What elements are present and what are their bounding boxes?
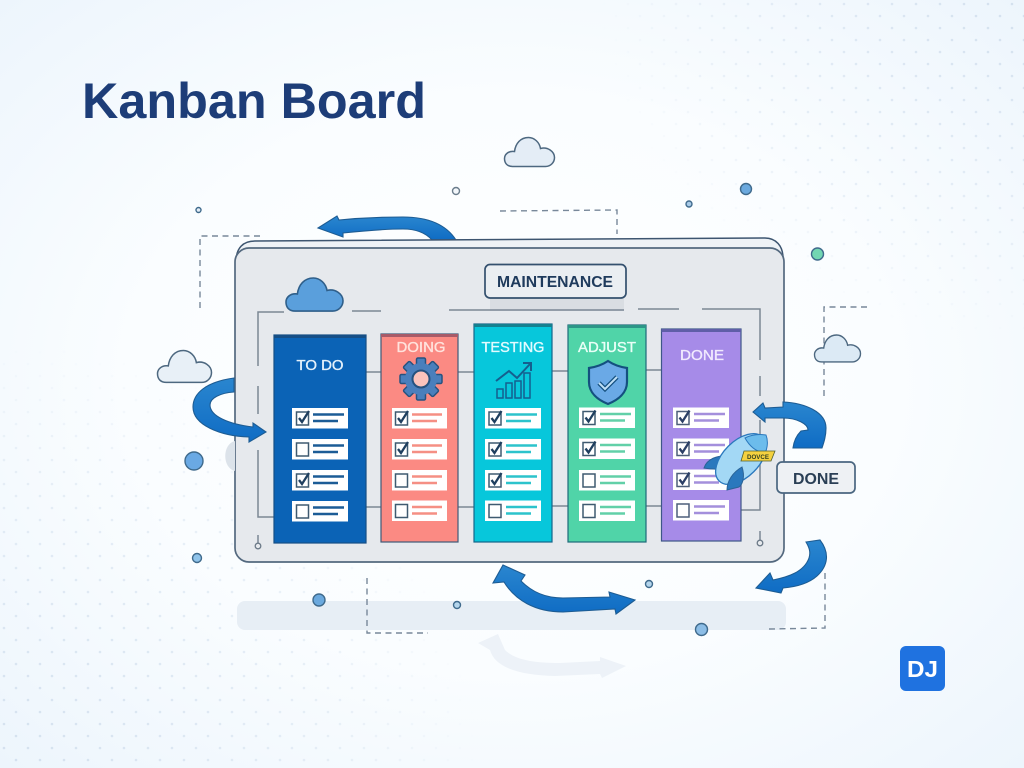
arrow: left — [193, 378, 266, 442]
arrow: bottom double-headed — [493, 565, 635, 614]
arrow: bottom right — [756, 540, 826, 593]
logo: DJ: DJ — [907, 656, 938, 682]
label: maintenance: MAINTENANCE — [497, 274, 613, 291]
arrow: right loop — [753, 402, 826, 448]
icon: growth chart — [496, 363, 531, 398]
column: testing — [474, 324, 552, 542]
column: to do: TO DO — [296, 358, 344, 374]
column: doing — [381, 334, 458, 542]
arrow: top — [318, 216, 456, 240]
column: adjust: ADJUST — [578, 340, 636, 356]
dashed guide lines — [200, 210, 867, 633]
logo: DJ — [900, 646, 945, 691]
icon: board cloud — [286, 278, 343, 311]
blob behind board edge — [225, 441, 235, 471]
board back sheet — [236, 238, 783, 299]
column: adjust — [568, 325, 646, 542]
board panel — [225, 248, 784, 562]
inner connector lines — [258, 309, 760, 517]
column: testing: TESTING — [482, 340, 544, 356]
column: doing: DOING — [396, 340, 446, 356]
column: to do — [274, 335, 366, 543]
label: done: DONE — [793, 471, 839, 488]
label: maintenance — [485, 264, 626, 298]
faint reflected arrow — [478, 634, 626, 678]
maintenance label shadow — [490, 296, 624, 311]
column: done — [662, 329, 741, 541]
column: done: DONE — [680, 348, 724, 364]
icon: shield — [589, 361, 627, 404]
icon: rocket — [704, 424, 776, 494]
cloud: right — [814, 335, 860, 362]
pins — [255, 531, 763, 549]
decorative circles — [185, 184, 824, 636]
ground shadow bar — [237, 601, 786, 630]
icon: gear — [400, 358, 442, 400]
label: done — [777, 462, 855, 493]
cloud: left — [158, 350, 212, 382]
rocket tag: DOVCE — [747, 454, 770, 461]
title: Kanban Board — [82, 73, 426, 129]
cloud: top — [504, 138, 554, 166]
